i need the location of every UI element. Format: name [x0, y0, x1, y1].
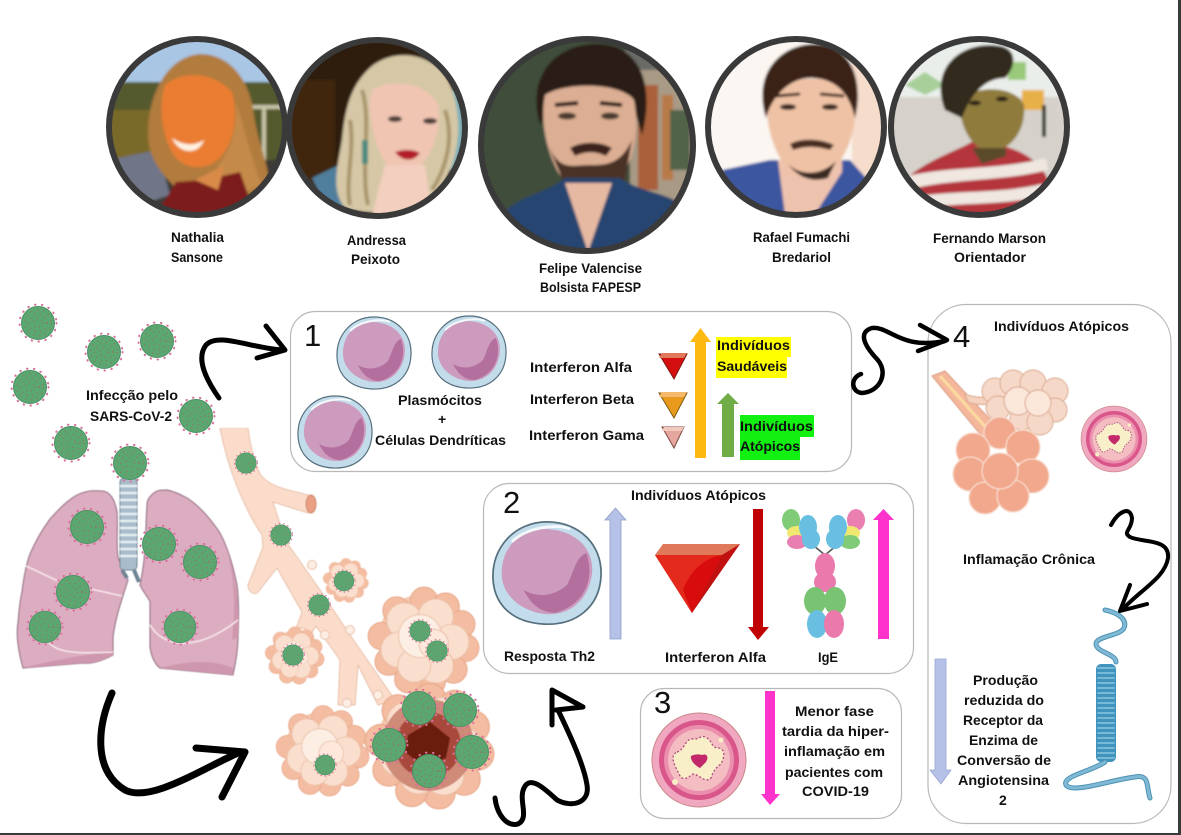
text: receptor description: 2: [999, 792, 1007, 808]
arrow: IgE up: [873, 509, 894, 639]
portrait: Fernando Marson: [885, 35, 1075, 225]
heading: Indivíduos Atópicos: [631, 487, 766, 503]
icon: Th2 cell: [493, 522, 601, 624]
text: interferon list: Interferon Alfa: [530, 359, 632, 375]
text: interferon list: [529, 359, 644, 443]
text: receptor description: Produção: [973, 672, 1038, 688]
text: panel 2 captions: IgE: [818, 649, 838, 665]
label: healthy individuals: [716, 337, 791, 378]
name: Rafael Fumachi Bredariol: [753, 229, 850, 265]
icon: airway cross-section: [652, 713, 746, 807]
text: receptor description: Conversão de: [957, 752, 1051, 768]
number 1: 1: [304, 318, 321, 353]
viruses: in lungs: [27, 508, 218, 645]
text: receptor description: Enzima de: [969, 732, 1038, 748]
heading: Indivíduos Atópicos: [994, 318, 1129, 334]
panel 2: atopic individuals response: [484, 484, 914, 674]
name: Andressa Peixoto: Peixoto: [351, 251, 400, 267]
portrait: Felipe Valencise: [475, 30, 700, 260]
viruses: infected alveoli: [370, 690, 490, 790]
icon: interferon beta triangle: [659, 392, 687, 418]
name: Felipe Valencise: Bolsista FAPESP: [540, 279, 641, 295]
arrow: chronic inflammation to receptor: [1111, 511, 1168, 611]
text: panel 2 captions: Resposta Th2: [504, 648, 595, 664]
text: interferon list: Interferon Beta: [530, 391, 634, 407]
text: infection label: [86, 387, 178, 424]
text: receptor description: reduzida do: [964, 692, 1044, 708]
arrow: interferon alpha down: [748, 509, 769, 640]
arrow: reduced receptor production: [930, 659, 951, 784]
arrow: panel 1 to panel 4: [853, 325, 947, 393]
lung fissures: [26, 566, 238, 653]
alveoli cluster: infected: [365, 683, 494, 809]
portrait: Rafael Fumachi Bredariol: [705, 36, 887, 218]
names under portraits: [171, 229, 1046, 295]
label: healthy individuals: Saudáveis: [717, 358, 787, 374]
arrow: virus to panel 1: [202, 326, 285, 398]
icon: interferon alpha large triangle: [655, 544, 740, 613]
name: Andressa Peixoto: Andressa: [347, 232, 406, 248]
arrow: healthy individuals up: [690, 328, 711, 458]
text: late phase description: Menor fase: [795, 703, 874, 719]
viruses: in airways: [235, 452, 448, 776]
illustration: bronchial tree: [216, 420, 494, 809]
panel 1: interferon production: [290, 312, 852, 472]
alveoli cluster: lower left: [276, 706, 369, 796]
text: chronic inflammation: Inflamação Crônica: [963, 551, 1095, 567]
text: receptor description: Angiotensina: [958, 772, 1049, 788]
icon: interferon alpha triangle: [659, 353, 687, 379]
name: Rafael Fumachi Bredariol: Bredariol: [772, 249, 831, 265]
name: Fernando Marson: [933, 230, 1046, 265]
text: cell names: Células Dendríticas: [375, 432, 506, 448]
arrow: atopic individuals up: [717, 393, 739, 457]
alveoli cluster: small left: [265, 627, 324, 684]
name: Nathalia Sansone: Sansone: [171, 249, 223, 265]
arrow: alveoli to panel 2: [495, 690, 587, 824]
panel 4: chronic inflammation: [928, 304, 1171, 824]
icon: interferon gamma triangle: [662, 427, 684, 448]
icon: ACE2 receptor helix: [1066, 610, 1150, 798]
name: Felipe Valencise: [539, 260, 642, 295]
icon: airway cross-section: [1081, 406, 1147, 472]
text: late phase description: [782, 703, 889, 799]
panel 3: late phase hyperinflammation: [640, 685, 902, 818]
lung: left: [17, 491, 128, 668]
viruses: free particles: [12, 304, 214, 482]
text: cell names: +: [438, 411, 446, 427]
text: interferon list: Interferon Gama: [529, 427, 644, 443]
airway nodules: [298, 560, 382, 708]
label: healthy individuals: Indivíduos: [717, 337, 790, 353]
arrow: reduced late phase: [761, 691, 780, 805]
portrait: Andressa Peixoto: [285, 35, 470, 225]
text: panel 2 captions: [504, 648, 838, 665]
name: Felipe Valencise: Felipe Valencise: [539, 260, 642, 276]
label: atopic individuals: Atópicos: [740, 438, 800, 454]
name: Andressa Peixoto: [347, 232, 406, 267]
icon: IgE antibody: [782, 509, 865, 638]
text: late phase description: inflamação em: [784, 743, 885, 759]
name: Fernando Marson: Orientador: [954, 249, 1027, 265]
portrait: Nathalia Sansone: [106, 36, 287, 218]
text: infection label: SARS-CoV-2: [90, 408, 172, 424]
label: atopic individuals: [740, 415, 814, 460]
icon: healthy and inflamed alveoli: [932, 370, 1068, 514]
number 2: 2: [503, 485, 520, 520]
name: Fernando Marson: Fernando Marson: [933, 230, 1046, 246]
illustration: lungs with trachea: [17, 478, 239, 675]
lung lower lobes: [24, 545, 238, 675]
text: late phase description: pacientes com: [785, 764, 883, 780]
text: panel 2 captions: Interferon Alfa: [665, 649, 766, 665]
name: Nathalia Sansone: Nathalia: [171, 229, 224, 245]
lung: right: [140, 490, 239, 675]
text: infection label: Infecção pelo: [86, 387, 178, 403]
arrow: lungs to alveoli: [101, 693, 245, 797]
arrow: Th2 up: [605, 508, 626, 639]
alveoli cluster: large upper: [368, 587, 479, 695]
text: late phase description: tardia da hiper-: [782, 723, 889, 739]
text: receptor description: [957, 672, 1051, 808]
text: cell names: Plasmócitos: [398, 392, 482, 408]
name: Nathalia Sansone: [171, 229, 224, 265]
name: Rafael Fumachi Bredariol: Rafael Fumachi: [753, 229, 850, 245]
text: cell names: [375, 392, 506, 448]
number 4: 4: [953, 319, 970, 354]
text: late phase description: COVID-19: [802, 783, 869, 799]
label: atopic individuals: Indivíduos: [740, 418, 813, 434]
alveoli cluster: small top: [323, 558, 368, 602]
text: receptor description: Receptor da: [963, 712, 1043, 728]
number 3: 3: [654, 685, 671, 720]
trachea: [120, 478, 139, 582]
cells: plasmocytes and dendritic cells: [298, 316, 506, 468]
